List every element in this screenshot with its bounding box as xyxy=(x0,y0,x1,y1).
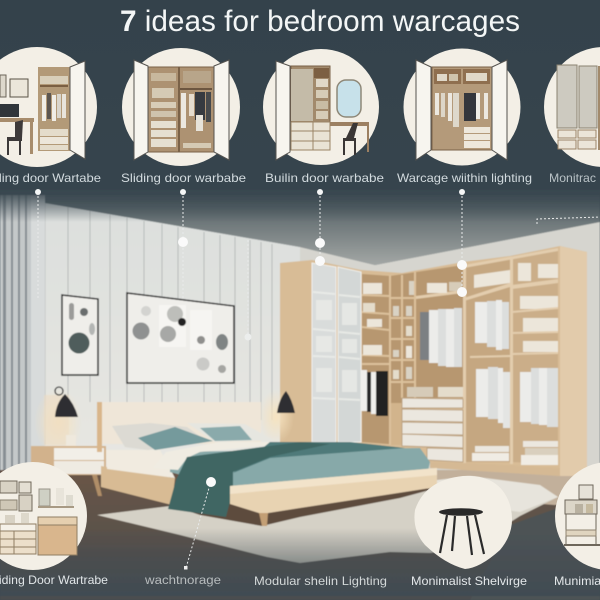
pillows xyxy=(112,423,205,450)
frosted sliding doors xyxy=(312,263,361,442)
label: modular shelving lighting: Modular shelin Lighting xyxy=(254,574,387,588)
large framed art xyxy=(127,293,234,383)
title: 7 ideas for bedroom warcages xyxy=(120,5,520,38)
black and white hanging clothes xyxy=(361,370,388,416)
label: sliding door wardrobe 2: Sliding door warbabe xyxy=(121,171,246,185)
cubby column lower panel xyxy=(390,403,402,445)
label: wardrobe storage: wachtnorage xyxy=(144,575,221,587)
floor xyxy=(0,470,600,600)
icon: minimal shelf unit xyxy=(555,462,600,570)
right end panel xyxy=(560,246,587,476)
upper shelves and stacks xyxy=(416,248,558,464)
right wall lamp xyxy=(258,390,295,444)
bed side rail xyxy=(101,466,175,505)
icon: modular wardrobe xyxy=(544,47,600,167)
drawers xyxy=(402,387,463,462)
wardrobe plinth xyxy=(430,462,560,476)
label: modular wardrobe: Monitrac xyxy=(549,171,596,185)
bedside table xyxy=(31,435,106,496)
rug xyxy=(97,478,558,563)
headboard xyxy=(98,402,261,444)
small framed art xyxy=(62,295,98,375)
top edge fade into header xyxy=(0,190,600,222)
shadow under bed xyxy=(170,488,437,526)
icon: wardrobe with lighting xyxy=(404,48,520,166)
label: built-in wardrobe: Builin door warbabe xyxy=(265,171,384,185)
hanging shirts xyxy=(420,300,558,428)
icon: sliding door wardrobe with desk xyxy=(0,47,97,167)
icon: stool xyxy=(414,476,512,569)
wardrobe xyxy=(280,246,587,476)
bedroom scene xyxy=(0,190,600,600)
wardrobe carcass xyxy=(280,246,587,476)
callout connectors and dots xyxy=(35,189,600,570)
mattress and duvet xyxy=(170,448,430,488)
corner interior xyxy=(362,265,463,446)
right wall xyxy=(300,222,600,500)
striped curtain xyxy=(0,195,45,470)
open sections interior xyxy=(464,258,510,462)
sheet xyxy=(106,450,175,478)
teal blanket xyxy=(168,442,330,517)
label: wardrobe with lighting: Warcage wiithin lighting xyxy=(397,171,532,185)
left wall lamp xyxy=(34,387,82,456)
icon: bottom left shelves and cabinet xyxy=(0,462,87,570)
icon: double door wardrobe xyxy=(122,48,240,166)
bottom edge fade xyxy=(0,528,600,596)
bottom folded stacks xyxy=(472,441,558,465)
cream fold xyxy=(153,442,300,470)
label: minimalist shelving: Monimalist Shelvirge xyxy=(411,574,527,588)
ceiling xyxy=(0,195,600,265)
bed xyxy=(97,402,437,526)
back wall with vertical panels xyxy=(45,203,300,480)
icon: built-in wardrobe with vanity mirror xyxy=(263,49,379,165)
bed front frame xyxy=(230,468,437,514)
corner shelves with folded items xyxy=(362,272,415,445)
